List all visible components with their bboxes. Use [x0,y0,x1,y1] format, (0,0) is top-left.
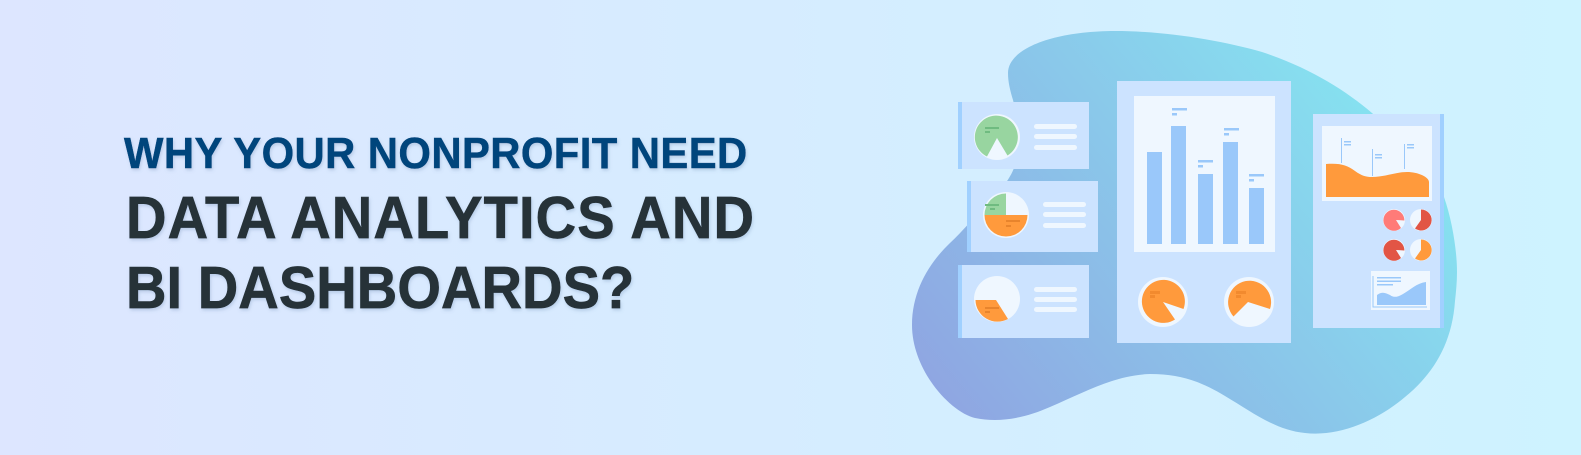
icon: green and orange pie [983,192,1029,238]
heading line 3: BI DASHBOARDS? [126,256,634,321]
panel: bottom left pie card [958,265,1089,338]
panel: top left pie card [958,102,1089,169]
text lines [1043,202,1086,228]
icon: pink pie [1383,209,1405,231]
icon: green pie [974,114,1020,160]
heading line 2: DATA ANALYTICS AND [126,186,754,251]
text lines [1034,287,1077,312]
text lines [1034,124,1077,150]
mini area chart [1371,271,1430,310]
panel: middle left pie card [967,181,1098,252]
area chart [1322,126,1432,201]
icon: orange small pie [1410,239,1432,261]
icon: left orange pie [1138,277,1188,327]
icon: dark red pie [1383,239,1405,261]
icon: red pie [1410,209,1432,231]
heading line 1: WHY YOUR NONPROFIT NEED [124,129,747,178]
title [124,129,754,321]
bar chart [1134,96,1275,252]
panel: center dashboard [1117,81,1291,343]
icon: orange pie [974,276,1020,322]
panel: right dashboard [1313,114,1444,328]
blob background [912,31,1457,434]
icon: right orange pie [1224,277,1274,327]
